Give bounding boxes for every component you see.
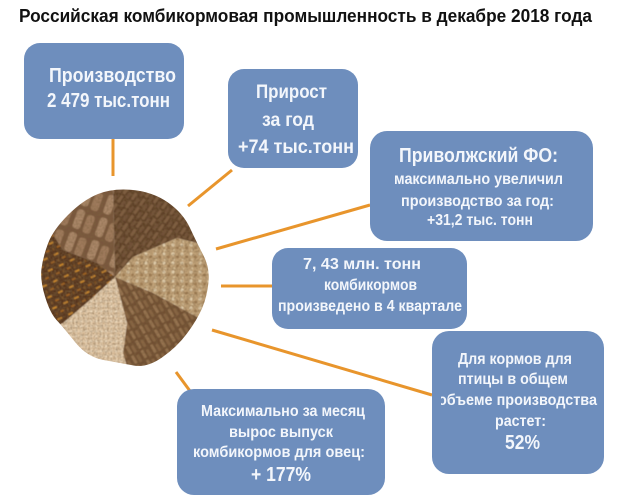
panel: poultry feed <box>432 331 604 474</box>
panel: Volga federal district <box>370 131 593 241</box>
panel: fourth quarter <box>272 248 467 329</box>
panel: sheep feed: вырос выпуск <box>229 424 334 441</box>
panel: poultry feed: объеме производства <box>438 392 597 409</box>
wedge: light crumbs <box>114 238 209 318</box>
panel: yearly growth: Прирост <box>256 82 327 103</box>
panel: sheep feed: комбикормов для овец: <box>193 444 365 461</box>
panel: yearly growth <box>228 69 358 168</box>
panel: production: 2 479 тыс.тонн <box>47 90 170 112</box>
wedge: dark pellets <box>112 190 198 278</box>
panel: Volga federal district: производство за год: <box>401 193 554 210</box>
panel: poultry feed: растет: <box>495 413 546 430</box>
wedge: large pellets <box>52 190 116 278</box>
panel: Volga federal district: Приволжский ФО: <box>399 145 558 167</box>
panel: sheep feed <box>177 389 385 495</box>
panel: fourth quarter: 7, 43 млн. тонн <box>303 256 421 273</box>
panel: Volga federal district: максимально увеличил <box>394 171 563 188</box>
connector lines <box>113 139 432 395</box>
panel: sheep feed: Максимально за месяц <box>201 403 365 420</box>
wedge: brown pellets <box>114 276 198 366</box>
panel: poultry feed: Для кормов для <box>458 351 572 368</box>
panel: production <box>24 43 184 139</box>
panel: Volga federal district: +31,2 тыс. тонн <box>427 212 533 229</box>
title: Российская комбикормовая промышленность в декабре 2018 года <box>19 6 593 26</box>
panel: sheep feed: + 177% <box>251 464 311 486</box>
wedge: orange mix <box>41 234 116 325</box>
wedge: light meal <box>60 277 128 364</box>
feed circle image <box>41 190 209 366</box>
panel: yearly growth: +74 тыс.тонн <box>238 137 354 158</box>
panel: fourth quarter: комбикормов <box>324 277 417 294</box>
panel: poultry feed: 52% <box>505 432 540 454</box>
panel: poultry feed: птицы в общем <box>458 371 568 388</box>
panel: fourth quarter: произведено в 4 квартале <box>278 298 462 315</box>
panel: yearly growth: за год <box>262 110 314 131</box>
panel: production: Производство <box>49 65 176 87</box>
